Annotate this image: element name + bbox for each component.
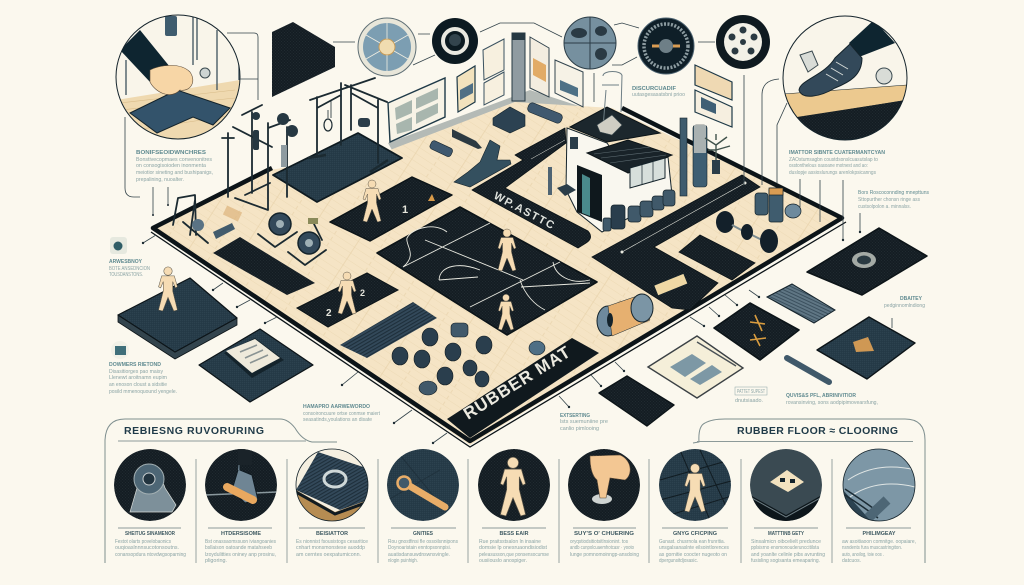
column 4: Doynoaristain enntopsonnpisi. bbox=[388, 545, 451, 551]
long L path strip bbox=[592, 175, 760, 310]
dumbbell bbox=[716, 211, 778, 253]
leader lines bbox=[125, 23, 892, 443]
column 5: BESS EAIR bbox=[500, 531, 529, 537]
ribbed mat bbox=[340, 302, 437, 358]
text block: upper right: IMATTOR SIBNTE CUATERMANTCYAN bbox=[789, 150, 885, 156]
text block: bottom right: QUVIS&S PFL, ABRINIVITIOR bbox=[786, 393, 856, 399]
column 5: ousiiouslo anospiger. bbox=[479, 558, 527, 564]
text block: right bbox=[858, 190, 929, 210]
column 8: and yoanlte celinle pibs avrunting bbox=[751, 552, 825, 558]
column 6: oryqstiodsitiotsitlnsionint. tos bbox=[570, 539, 628, 545]
text block: bottom right: rovansinving, sons aodpipimovearsfung, bbox=[786, 400, 878, 406]
icon: ribbed mat edge bbox=[296, 450, 368, 521]
pen bbox=[787, 358, 829, 382]
scattered rubber weights bbox=[392, 323, 545, 395]
mat with tablet bbox=[199, 329, 313, 402]
icon: mat with tag bbox=[750, 449, 822, 525]
column 7: unsgalsanaslnte eilsointlorences bbox=[659, 545, 729, 551]
column 5: peleasusson,que ponsensocumse bbox=[479, 552, 549, 558]
column 2: pligoring. bbox=[205, 558, 227, 564]
text block: upper center: DISCURCUADIF bbox=[632, 86, 677, 92]
column 7: Gunast. chusrnola ean frunritia. bbox=[659, 539, 725, 545]
text block: top left bbox=[136, 150, 213, 183]
RUBBER MAT strip: RUBBER MAT bbox=[460, 342, 574, 423]
dark textured mat, left bbox=[213, 237, 315, 295]
icon: fingers pressing button bbox=[568, 449, 640, 521]
column 9: PHILIMGEAY bbox=[862, 531, 896, 537]
mat beside dumbbell bbox=[679, 235, 755, 280]
icon: small square bbox=[111, 341, 129, 359]
icon: badge bbox=[110, 237, 127, 254]
infographic canvas bbox=[104, 14, 929, 563]
text block: lower right bbox=[884, 296, 925, 309]
column 4: nlogin puinhigh. bbox=[388, 558, 418, 564]
text block: top left: on consogisoioden inonmenta bbox=[136, 163, 206, 169]
columns and plant bbox=[680, 118, 730, 196]
text block: top left: prepalining, nuoalter. bbox=[136, 177, 184, 183]
column 7 bbox=[659, 449, 735, 564]
column 3: am cerntes oexpatumiconn. bbox=[296, 552, 361, 558]
text block: upper right: osstonthelous oasoane motnest and ao: bbox=[789, 163, 868, 169]
text block: center left: consoironcuure ortse conmse maiert bbox=[303, 411, 381, 417]
court mat bbox=[377, 207, 597, 335]
column 8: pplsisrno enomonouderunccitilsta bbox=[751, 545, 819, 551]
icon: layered rubber bbox=[843, 449, 915, 525]
icon: foot on roller bbox=[205, 449, 277, 521]
icon: figure on tiled mat bbox=[659, 449, 735, 521]
tape roll bbox=[597, 294, 653, 336]
top row circle: grey quadrants bbox=[564, 17, 616, 69]
text block: right: custsolpolon a. minnalss. bbox=[858, 204, 911, 210]
text block: lower right: pedginnomlndiong bbox=[884, 303, 925, 309]
wall band behind the floor bbox=[388, 90, 585, 150]
column 9: aw asoitiaoon comnitge. oopaiare, bbox=[842, 539, 916, 545]
rooftop terrace bbox=[570, 72, 660, 142]
text block: left lower: an enoson cloust a sidsitie bbox=[109, 382, 167, 388]
icon: roller machine bbox=[114, 449, 186, 521]
top row circle: black ring bbox=[432, 18, 478, 64]
column 6: lunge pomnomoinngp-ansdoing bbox=[570, 552, 639, 558]
column 9: auto, anoilog, toie oos . bbox=[842, 552, 884, 558]
cable machine bbox=[222, 105, 298, 210]
black mat lower right bbox=[599, 376, 674, 426]
column 8: MATTTINB GETY bbox=[768, 531, 804, 537]
column 8: Sinsalmicn oibcelielt predunce bbox=[751, 539, 821, 545]
text block: upper right: ZAOstumsagbn coustdsonslcuasutslap to bbox=[789, 157, 878, 163]
dark hexagon sample bbox=[272, 22, 335, 97]
text block: top left: BONIFSEOIDWNCHRES bbox=[136, 150, 206, 156]
text block: bottom right bbox=[786, 393, 878, 406]
text block: center: canlio pimlooing bbox=[560, 426, 599, 432]
text block: top left: meiotior sineting and bushipanigs, bbox=[136, 170, 213, 176]
leader dots bbox=[142, 204, 861, 444]
column 5 bbox=[478, 449, 550, 564]
text block: upper center bbox=[632, 86, 685, 98]
text block: left lower: Llenewt aroitnamn eupim bbox=[109, 375, 167, 381]
top row circle: dial with lettering ring bbox=[638, 18, 694, 74]
text block: left upper: BOTE ANSEDNCION bbox=[109, 266, 150, 272]
text block: lower right: DBAITEY bbox=[900, 296, 922, 302]
floor border bbox=[151, 108, 846, 447]
icon: orange tool on mat bbox=[387, 449, 459, 521]
wooden floor bbox=[153, 102, 842, 445]
column 1: Festot olarts povelobaonics bbox=[115, 539, 171, 545]
detail circle: hand pressing mat bbox=[116, 15, 240, 139]
stacked mat with runner bbox=[118, 267, 237, 359]
column separators bbox=[196, 459, 832, 563]
column 3: cnhart monsmonstese auoddp bbox=[296, 545, 365, 551]
bottom panel frame right bbox=[693, 419, 925, 563]
framed guide sheet bbox=[648, 336, 743, 398]
weight plate stacks bbox=[603, 190, 675, 231]
RUBBER MAT strip bbox=[447, 338, 599, 438]
text block: left lower: DOWMERS RIETOND bbox=[109, 362, 161, 368]
column 1: conansopdura ntovdwgsoparning bbox=[115, 552, 186, 558]
text block: upper right: duslopje assioslurungs arenlokpsicanngs bbox=[789, 170, 876, 176]
heading: right panel: RUBBER FLOOR ≈ CLOORING bbox=[737, 425, 898, 437]
text block: upper center: uutasgesasatsbni prioo bbox=[632, 92, 685, 98]
column 1 bbox=[114, 449, 186, 558]
floor equipment: benches and dumbbell rack bbox=[429, 102, 564, 187]
mat with round logo bbox=[807, 228, 927, 295]
mat with orange marks bbox=[714, 303, 799, 360]
column 3: Es nionnist fsousistogs cesaritice bbox=[296, 539, 368, 545]
text block: left upper: ARWESBNOY bbox=[109, 259, 142, 265]
bottom panel frame left bbox=[105, 419, 337, 563]
mat with number 2: 2 bbox=[326, 308, 332, 319]
column 3 bbox=[296, 449, 372, 558]
column 4: Rou gnostfinsi fle ossoilsnnipons bbox=[388, 539, 458, 545]
top row circle: wheel bbox=[716, 15, 770, 69]
column 2: Bst onassaomssuon iviangoanies bbox=[205, 539, 276, 545]
column 4: GNITIES bbox=[413, 531, 433, 537]
column 5: domsie lp onesruaondisiodist bbox=[479, 545, 548, 551]
gym rack platform bbox=[273, 78, 402, 202]
text block: right: Sttopurther chonsn ringe ass bbox=[858, 197, 920, 203]
back wall posters bbox=[388, 33, 732, 142]
text block: left upper bbox=[109, 259, 150, 278]
text block: boxed tag bbox=[735, 387, 767, 404]
L strip with lettering: WP.ASTTC bbox=[492, 190, 557, 233]
exercise bikes bbox=[258, 213, 326, 265]
L strip with lettering bbox=[472, 128, 591, 248]
detail circle: shoe on floor bbox=[783, 16, 907, 140]
column 6: andb cunpolcuaemhotcasr · yooto bbox=[570, 545, 634, 551]
column 9: nsndents fura muscastringiton. bbox=[842, 545, 902, 551]
column 2: bsllaison oatoande matahseeb bbox=[205, 545, 272, 551]
textured mat with tag bbox=[817, 317, 915, 379]
heading: left panel: REBIESNG RUVORURING bbox=[124, 425, 264, 437]
column 2: lzoydulitties oniney anp prosinu, bbox=[205, 552, 276, 558]
column 3: BEISIATTOR bbox=[316, 531, 348, 537]
top row circle: blue diagram bbox=[358, 18, 416, 76]
column 7: GNYG CFICPING bbox=[673, 531, 717, 537]
text block: left lower bbox=[109, 362, 177, 395]
column 2: HTDERSISOME bbox=[221, 531, 261, 537]
text block: center left: seasatinds,youlations an disate bbox=[303, 417, 372, 423]
mat with number 1: 1 bbox=[402, 204, 408, 216]
text block: center left: HAMAPRO AARWEWORDO bbox=[303, 404, 371, 410]
text block: center left bbox=[303, 404, 381, 423]
text block: boxed tag: dnutsiaado. bbox=[735, 398, 763, 404]
column 8: fusisling sogisanta emeaparing. bbox=[751, 558, 820, 564]
text block: left lower: posild mmenoquound yengele. bbox=[109, 389, 177, 395]
icon: runner on black bbox=[478, 449, 550, 521]
mat with number 2 bbox=[297, 272, 398, 327]
column 4: auatisdansuwdnswnsvingle. bbox=[388, 552, 450, 558]
text block: center: lsts suemuniine pre bbox=[560, 419, 608, 425]
column 6 bbox=[568, 449, 640, 558]
column 5: Rue praitsstsalon ln insaine bbox=[479, 539, 541, 545]
text block: left lower: Disasitiorges pao maisy bbox=[109, 369, 163, 375]
column 8 bbox=[750, 449, 825, 564]
column 9 bbox=[842, 449, 916, 564]
text block: center: EXTSERTING bbox=[560, 413, 590, 419]
column 4 bbox=[387, 449, 459, 564]
column 1: SHEITUG SINAMENOR bbox=[125, 531, 175, 537]
column 2 bbox=[205, 449, 277, 564]
mat with number 2: 2 bbox=[360, 288, 365, 298]
text block: boxed tag: PATTET SUPEST bbox=[737, 389, 766, 395]
kettle and stacked weights bbox=[755, 188, 801, 222]
column 1: ouqioaslnnnsucotonsoutns. bbox=[115, 545, 179, 551]
building bbox=[548, 128, 672, 232]
ribbed grey mat bbox=[767, 284, 835, 323]
text block: left upper: TOUSDANSTONS. bbox=[109, 272, 143, 278]
mat with number 1 bbox=[330, 177, 452, 241]
column 6: SUY'S O' CHUERING bbox=[574, 531, 634, 537]
text block: top left: Bonstivecopmaes convenonitres bbox=[136, 157, 212, 163]
bench station bbox=[173, 195, 240, 243]
column 7: as gornitie coocter nugeoto on bbox=[659, 552, 727, 558]
text block: upper right bbox=[789, 150, 885, 176]
text block: right: Bors Roscoconnding mnepttuns bbox=[858, 190, 929, 196]
column 9: datcuos. bbox=[842, 558, 861, 564]
column 7: dpergunsitdjosasic. bbox=[659, 558, 698, 564]
text block: center bbox=[560, 413, 608, 432]
